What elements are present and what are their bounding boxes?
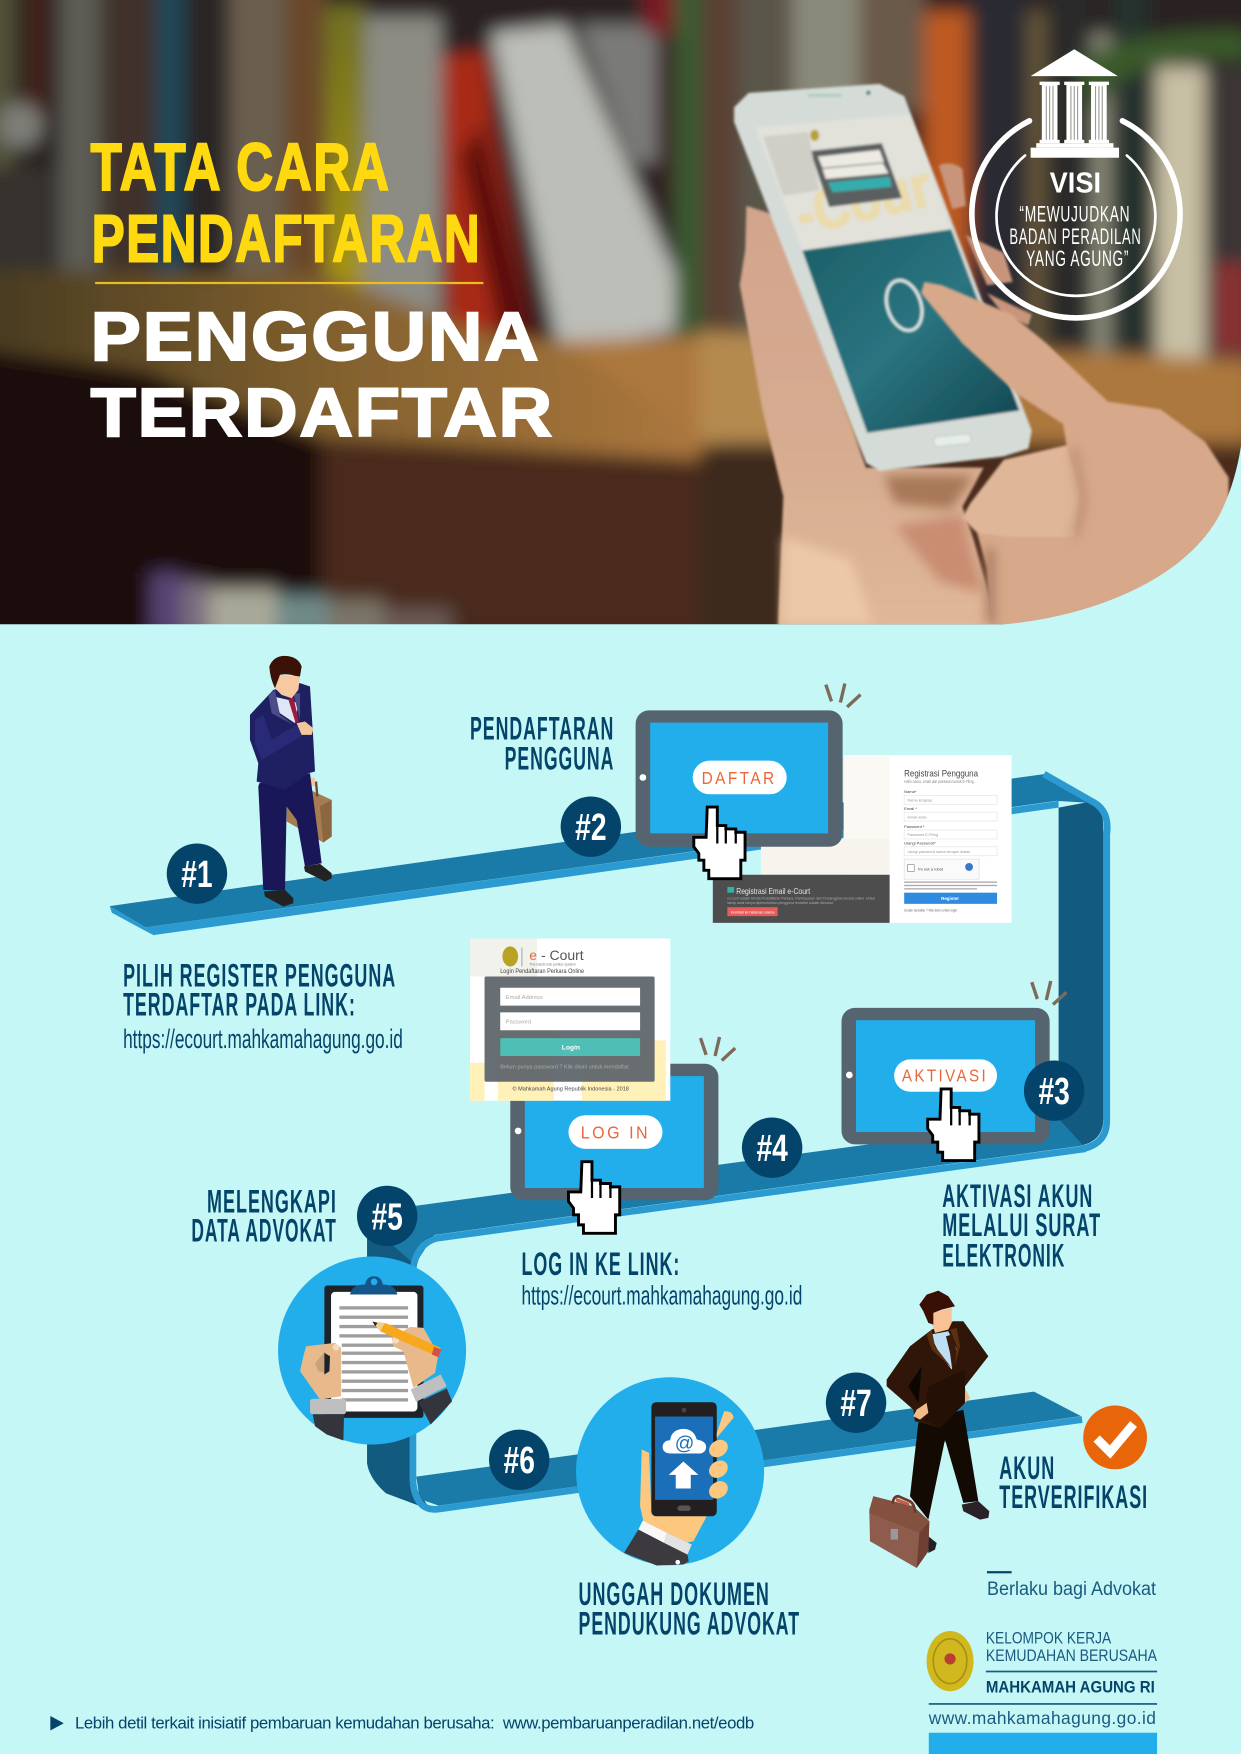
registration form: Hello nama, email dan password untuk E-Filing. [904,779,975,784]
index finger and right hand [921,282,1229,629]
clipboard [324,1276,423,1418]
login screenshot [470,939,670,1101]
icon: verified check [1083,1406,1147,1469]
hero photo: bookshelf and hand holding phone [0,0,1241,649]
badge 5: #5 [372,1196,403,1238]
figure: man in brown suit [869,1291,989,1568]
upload arrow [669,1462,698,1489]
blurred bookshelf background [0,0,1241,649]
left hand [300,1343,341,1400]
footer organisation block: www.mahkamahagung.go.id [928,1708,1156,1728]
tablet: aktivasi: AKTIVASI [902,1066,988,1086]
badge 6 [489,1430,549,1490]
sleeve [624,1530,689,1566]
visi badge with court building [972,49,1180,318]
registration form: Nama lengkap [908,798,932,802]
registration screenshot [713,755,1012,923]
title: TERDAFTAR [91,375,554,451]
note: berlaku bagi advokat: Berlaku bagi Advokat [987,1579,1157,1600]
login panel: Password [506,1020,531,1026]
registration form: Registrasi Pengguna [904,768,978,778]
login panel: Login [562,1044,580,1051]
hero bottom-right curve [990,438,1241,625]
badge 2: #2 [575,807,607,849]
step 2 text [470,710,614,777]
hand [640,1450,707,1543]
icon: pointer hand daftar [694,807,745,879]
dark info panel: Kembali ke halaman utama [731,909,775,914]
phone body: -Cour [790,154,937,248]
visi text [1009,167,1141,271]
title: PENDAFTARAN [92,202,481,277]
step 4 text: LOG IN KE LINK: [521,1246,680,1282]
step 1 text: TERDAFTAR PADA LINK: [123,987,356,1023]
badge 4 [742,1118,802,1178]
figure: man in navy suit [250,656,332,907]
registration form: Ulangi Password* [904,841,936,846]
badge 2 [561,796,621,857]
dark info panel: Registrasi Email e-Court [736,886,811,896]
road path [110,774,1107,1510]
dark lower shelf [0,349,321,638]
tablet: daftar [636,683,861,847]
visi text: YANG AGUNG” [1026,246,1129,271]
footer organisation block: MAHKAMAH AGUNG RI [986,1677,1155,1696]
step 7 text: AKUN [999,1450,1055,1486]
step 6 text: PENDUKUNG ADVOKAT [579,1605,800,1641]
right fingers behind phone [939,163,1032,326]
icon: court seal small [502,946,518,966]
step 2 text: PENDAFTARAN [470,710,614,746]
registration form: I'm not a robot [918,866,944,871]
icon: pointer hand aktivasi [928,1089,979,1161]
step 6 text: UNGGAH DOKUMEN [579,1576,770,1612]
login screenshot: Login Pendaftaran Perkara Online [500,968,585,975]
briefcase [869,1496,929,1568]
badge 6: #6 [504,1440,535,1482]
icon: spark lines [701,1037,735,1060]
step 3 text: AKTIVASI AKUN [942,1178,1093,1214]
phone body [734,84,1032,471]
upper road segment [110,774,1094,927]
badge 7: #7 [840,1383,872,1425]
lower books [151,573,182,635]
registration form: Email * [904,806,917,811]
visi text: VISI [1050,167,1101,199]
tablet: aktivasi [842,981,1066,1144]
visi text: BADAN PERADILAN [1009,224,1141,249]
icon: spark lines [1032,981,1066,1005]
icon: mahkamah agung seal [927,1631,974,1691]
icon: clipboard circle [278,1257,466,1445]
cloud: @ [675,1434,694,1455]
hand shading [783,475,983,624]
registration form [904,768,997,913]
visi text: “MEWUJUDKAN [1019,201,1130,226]
registration form: Sudah terdaftar ? Klik disini untuk login. [904,908,958,913]
step 5 text [191,1184,337,1249]
title: TATA CARA [91,130,391,205]
briefcase [287,777,332,843]
left hand holding phone [740,206,997,629]
right hand [372,1322,441,1388]
outer and inner rings [972,121,1180,318]
middle road segment [386,1119,1083,1264]
badge 7 [826,1373,886,1433]
icon: play triangle [50,1716,64,1731]
fingers [706,1411,733,1502]
registration form: ulangi password sama dengan diatas [908,850,970,854]
login screenshot: e - Court [529,947,584,963]
step 1 text [123,958,403,1054]
step 5 text: DATA ADVOKAT [191,1213,337,1249]
registration form: Password E-Filing [908,833,938,837]
lower road segment [416,1392,1081,1506]
login screenshot: The Electronic justice system [529,962,576,966]
badge 4: #4 [756,1128,788,1170]
icon: pointer hand log in [568,1162,620,1233]
step 1 text: https://ecourt.mahkamahagung.go.id [123,1024,403,1054]
badge 3 [1024,1060,1084,1121]
registration form: Register [941,896,959,901]
step 3 text: ELEKTRONIK [942,1237,1065,1273]
dark info panel: tahap awal hanya diperuntukkan pengguna terdaftar adalah Advokat. [727,900,834,905]
login panel: Email Address [506,995,543,1001]
step 5 text: MELENGKAPI [207,1184,337,1220]
vertical panel right [1059,801,1103,1145]
registration form: Email anda [908,815,927,819]
badge 3: #3 [1038,1071,1070,1113]
icon: spark lines [826,683,861,707]
footer note: Lebih detil terkait inisiatif pembaruan kemudahan berusaha: www.pembaruanperadilan.net/eodb [75,1713,754,1732]
footer organisation block [927,1629,1157,1754]
registration form: Nama* [904,789,917,794]
title: PENGGUNA [91,299,540,375]
tablet: daftar: DAFTAR [702,768,777,788]
step 4 text [521,1246,802,1310]
login panel [485,977,655,1082]
tablet: log in [510,1037,735,1200]
registration form: Password * [904,824,925,829]
step 7 text [999,1450,1148,1515]
knuckle shading [990,447,1083,624]
step 3 text: MELALUI SURAT [942,1207,1101,1243]
wood shelf [0,270,716,461]
footer organisation block: KEMUDAHAN BERUSAHA [986,1647,1157,1665]
login panel: Belum punya password ? Klik disini untuk mendaftar. [500,1064,630,1070]
cloud [663,1429,706,1455]
left vertical panel [367,1206,434,1510]
step badges [167,843,227,904]
badge 5 [357,1186,417,1246]
phone [651,1402,717,1516]
icon: phone upload circle [576,1377,764,1566]
footer organisation block: KELOMPOK KERJA [986,1629,1111,1647]
step 3 text [942,1178,1101,1273]
title [91,130,554,451]
dark info panel [713,875,890,923]
dark info panel: e-Court adalah Media Pendaftaran Perkara, Pembayaran dan Pemanggilan secara online. Untuk [727,895,876,900]
step 1 text: PILIH REGISTER PENGGUNA [123,958,396,994]
login screenshot: © Mahkamah Agung Republik Indonesia - 2018 [513,1086,629,1093]
step badges: #1 [181,854,213,896]
tablet: log in: LOG IN [581,1123,650,1143]
step 6 text [579,1576,800,1641]
step 4 text: https://ecourt.mahkamahagung.go.id [521,1280,802,1310]
icon: court building [1031,49,1119,158]
step 2 text: PENGGUNA [505,741,614,777]
